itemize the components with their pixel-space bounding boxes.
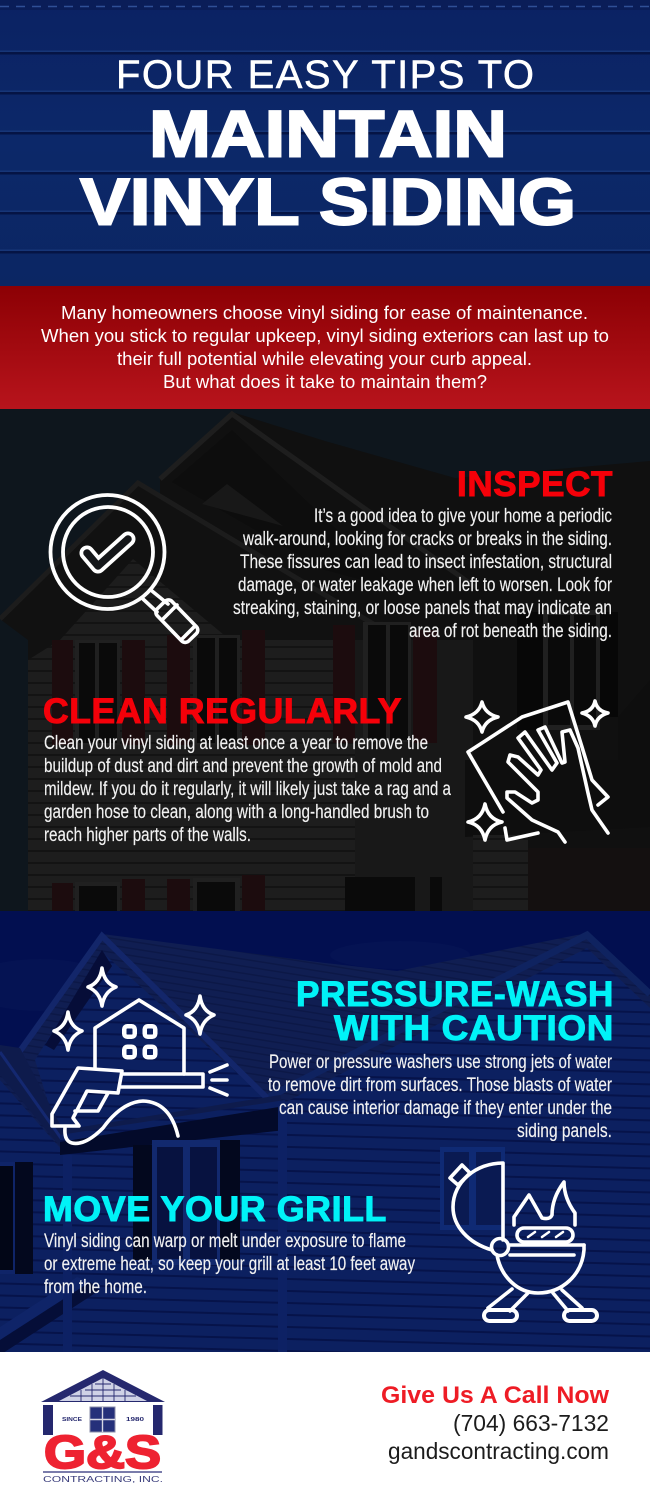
text: clean body: Clean your vinyl siding at least once a year to remove the bbox=[44, 733, 428, 754]
text: clean body: garden hose to clean, along with a long-handled brush to bbox=[44, 802, 429, 823]
intro panel: Many homeowners choose vinyl siding for ease of maintenance. bbox=[61, 303, 588, 323]
intro panel bbox=[0, 286, 650, 409]
text: pressure-wash body bbox=[268, 1052, 613, 1142]
intro panel: When you stick to regular upkeep, vinyl siding exteriors can last up to bbox=[41, 326, 609, 346]
icon: magnifying glass with check bbox=[50, 495, 200, 644]
contact details: (704) 663-7132 bbox=[453, 1410, 609, 1436]
text: clean body: reach higher parts of the walls. bbox=[44, 825, 251, 846]
title: VINYL SIDING bbox=[80, 164, 576, 238]
text: grill body: from the home. bbox=[44, 1277, 147, 1298]
logo: G&S Contracting: CONTRACTING, INC. bbox=[43, 1474, 163, 1484]
text: clean body: mildew. If you do it regularly, it will likely just take a rag and a bbox=[44, 779, 451, 800]
panel background: dark house photo bbox=[0, 409, 650, 912]
text: clean body bbox=[44, 733, 451, 846]
logo: G&S Contracting bbox=[41, 1370, 165, 1484]
contact details: gandscontracting.com bbox=[388, 1438, 609, 1464]
footer panel bbox=[0, 1352, 650, 1506]
contact details: Give Us A Call Now bbox=[381, 1382, 609, 1409]
intro panel: their full potential while elevating your curb appeal. bbox=[117, 349, 532, 369]
title: FOUR EASY TIPS TO bbox=[116, 53, 534, 97]
contact details bbox=[381, 1382, 609, 1464]
text: inspect body bbox=[233, 506, 613, 642]
heading: inspect: INSPECT bbox=[457, 465, 613, 504]
logo: G&S Contracting: SINCE bbox=[62, 1417, 83, 1423]
text: clean body: buildup of dust and dirt and prevent the growth of mold and bbox=[44, 756, 442, 777]
logo: G&S Contracting: G&S bbox=[44, 1426, 161, 1478]
panel background: blue house photo bbox=[0, 911, 650, 1355]
logo: G&S Contracting: 1980 bbox=[126, 1417, 144, 1423]
header panel: blue siding bbox=[0, 0, 650, 286]
icon: grill with flames bbox=[450, 1163, 597, 1321]
heading: move your grill: MOVE YOUR GRILL bbox=[43, 1190, 387, 1229]
title: MAINTAIN bbox=[149, 96, 507, 170]
heading: clean regularly: CLEAN REGULARLY bbox=[43, 692, 402, 731]
text: grill body bbox=[44, 1231, 415, 1298]
heading: pressure-wash with caution: PRESSURE-WASH bbox=[296, 975, 614, 1014]
heading: pressure-wash with caution: WITH CAUTION bbox=[334, 1009, 614, 1048]
text: grill body: or extreme heat, so keep your grill at least 10 feet away bbox=[44, 1254, 415, 1275]
title bbox=[80, 53, 576, 238]
text: pressure-wash body: siding panels. bbox=[517, 1121, 612, 1142]
icon: pressure washer and house bbox=[52, 968, 227, 1143]
icon: cleaning rag with sparkles bbox=[466, 701, 608, 842]
heading: pressure-wash with caution bbox=[296, 975, 614, 1048]
text: grill body: Vinyl siding can warp or melt under exposure to flame bbox=[44, 1231, 406, 1252]
intro panel: But what does it take to maintain them? bbox=[163, 372, 487, 392]
